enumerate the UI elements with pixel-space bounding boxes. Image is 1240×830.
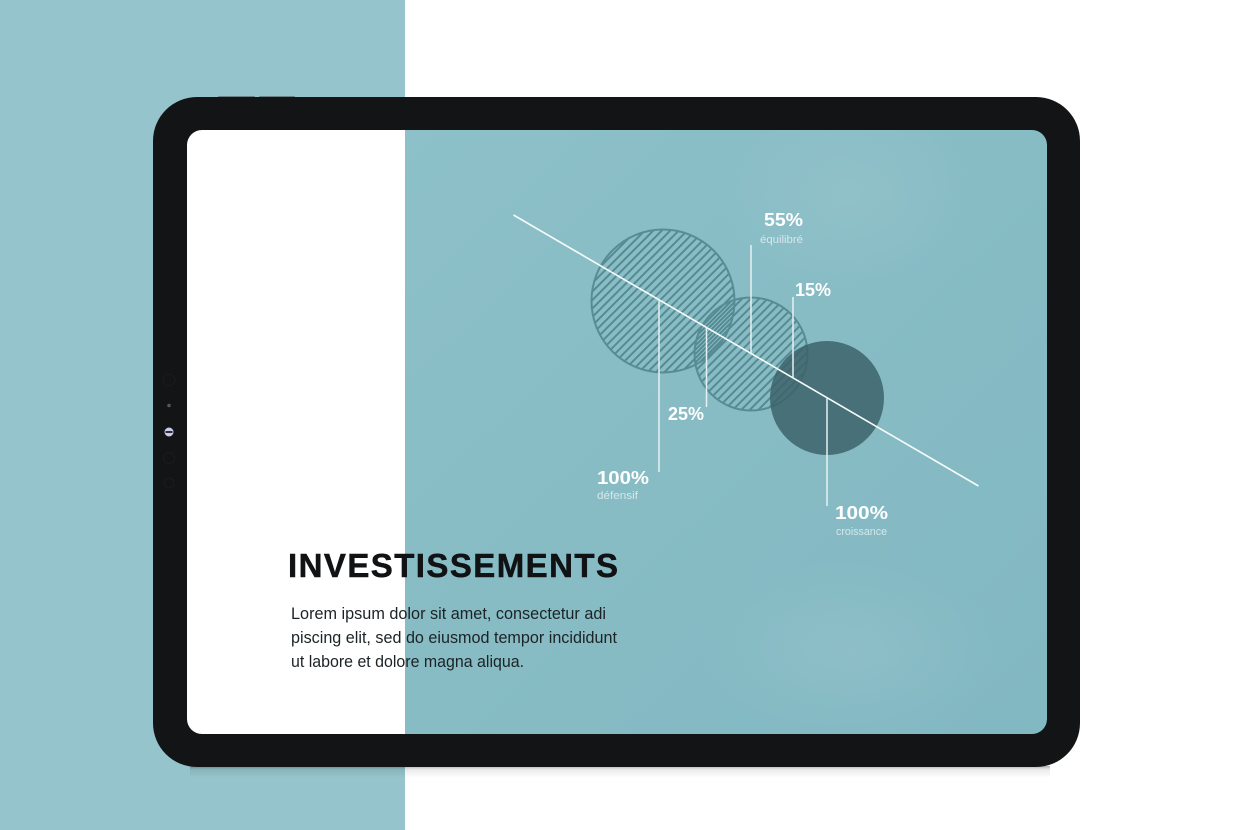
diagonal line [514, 215, 978, 486]
label: 100% défensif: défensif [597, 490, 639, 502]
device shadow [190, 766, 1050, 778]
screen [187, 95, 1047, 740]
label: 55% équilibré [760, 210, 803, 246]
heading: INVESTISSEMENTS [288, 547, 618, 584]
tablet body [153, 97, 1080, 767]
body text: Lorem ipsum dolor sit amet, consectetur adi [291, 604, 606, 623]
body text [291, 604, 617, 671]
leader lines [659, 245, 827, 506]
label: 15%: 15% [795, 280, 831, 300]
background: teal band [0, 0, 405, 830]
tablet device [153, 95, 1080, 767]
label: 55% équilibré: 55% [764, 210, 803, 230]
label: 100% croissance: 100% [835, 503, 888, 523]
label: 100% défensif [597, 468, 649, 502]
body text: ut labore et dolore magna aliqua. [291, 652, 524, 671]
label: 100% défensif: 100% [597, 468, 649, 488]
screen teal panel [405, 130, 1047, 734]
chart: risk line with three circles [514, 210, 978, 538]
label: 100% croissance: croissance [836, 526, 887, 538]
circle: croissance (solid) [770, 341, 884, 455]
camera column [163, 374, 175, 488]
circle: défensif (hatched) [592, 230, 734, 372]
screen white panel [187, 130, 405, 734]
label: 100% croissance [835, 503, 888, 538]
side buttons [218, 96, 295, 98]
circle: équilibré (hatched) [694, 298, 808, 410]
label: 55% équilibré: équilibré [760, 234, 803, 246]
label: 25%: 25% [668, 404, 704, 424]
body text: piscing elit, sed do eiusmod tempor incididunt [291, 628, 617, 647]
